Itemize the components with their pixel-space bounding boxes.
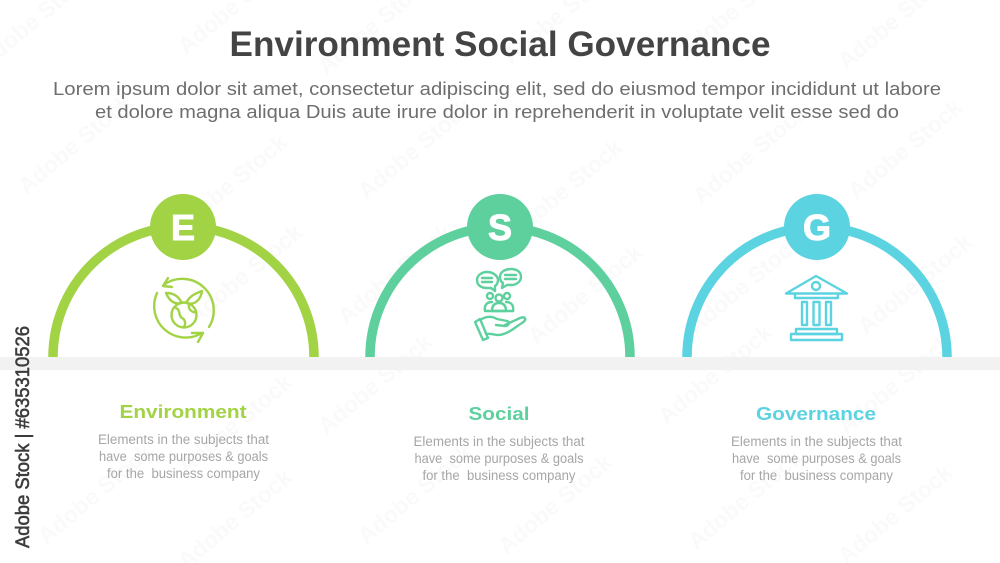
description: environment [98, 432, 269, 481]
background watermark: Adobe Stock [843, 94, 967, 204]
panel: social [370, 194, 630, 483]
background watermark: Adobe Stock [33, 439, 157, 549]
semicircle arc: social [370, 227, 630, 357]
badge: G [784, 194, 850, 260]
background watermark: Adobe Stock [313, 329, 437, 439]
description: environment: for the business company [107, 466, 260, 481]
description: governance [731, 434, 902, 483]
background watermark: Adobe Stock [173, 369, 297, 479]
background watermark: Adobe Stock [688, 99, 812, 209]
subtitle text [53, 78, 941, 122]
background watermark: Adobe Stock [653, 319, 777, 429]
panel: governance [687, 194, 947, 483]
panel: environment [53, 194, 314, 481]
background watermark: Adobe Stock [683, 229, 807, 339]
heading: Governance: Governance [756, 403, 876, 424]
title: Environment Social Governance [230, 25, 770, 64]
icon: government building [786, 276, 847, 340]
subtitle text: Lorem ipsum dolor sit amet, consectetur adipiscing elit, sed do eiusmod tempor incididunt ut labore [53, 78, 941, 99]
badge: E [150, 194, 216, 260]
icon: globe with leaves and circular arrows [154, 278, 214, 342]
description: governance: for the business company [740, 468, 893, 483]
subtitle text: et dolore magna aliqua Duis aute irure dolor in reprehenderit in voluptate velit esse sed do [95, 101, 899, 122]
background watermark: Adobe Stock [333, 219, 457, 329]
description: environment: have some purposes & goals [99, 449, 268, 464]
background watermark: Adobe Stock [13, 89, 137, 199]
background watermark: Adobe Stock [168, 129, 292, 239]
description: social: have some purposes & goals [414, 451, 584, 466]
heading: Environment: Environment [120, 401, 246, 422]
background watermark: Adobe Stock [353, 94, 477, 204]
badge: E: E [171, 207, 195, 248]
semicircle arc: governance [687, 227, 947, 357]
background watermark: Adobe Stock [683, 444, 807, 554]
badge: S: S [488, 207, 512, 248]
description: social [414, 434, 585, 483]
heading: Social: Social [468, 403, 530, 424]
description: governance: Elements in the subjects that [731, 434, 902, 449]
badge: G: G [803, 207, 831, 248]
background watermark: Adobe Stock [853, 229, 977, 339]
description: governance: have some purposes & goals [732, 451, 901, 466]
background watermark: Adobe Stock [503, 134, 627, 244]
icon: people with speech bubbles over hand [475, 269, 525, 340]
baseline bar [0, 357, 1000, 370]
description: social: for the business company [422, 468, 576, 483]
side stock label: Adobe Stock | #635310526 [13, 326, 34, 548]
background watermark: Adobe Stock [353, 439, 477, 549]
description: social: Elements in the subjects that [414, 434, 585, 449]
badge: S [467, 194, 533, 260]
background watermark: Adobe Stock [493, 449, 617, 559]
background watermark: Adobe Stock [523, 239, 647, 349]
semicircle arc: environment [53, 226, 314, 357]
background watermark: Adobe Stock [833, 329, 957, 439]
description: environment: Elements in the subjects that [98, 432, 269, 447]
background watermark: Adobe Stock [183, 219, 307, 329]
